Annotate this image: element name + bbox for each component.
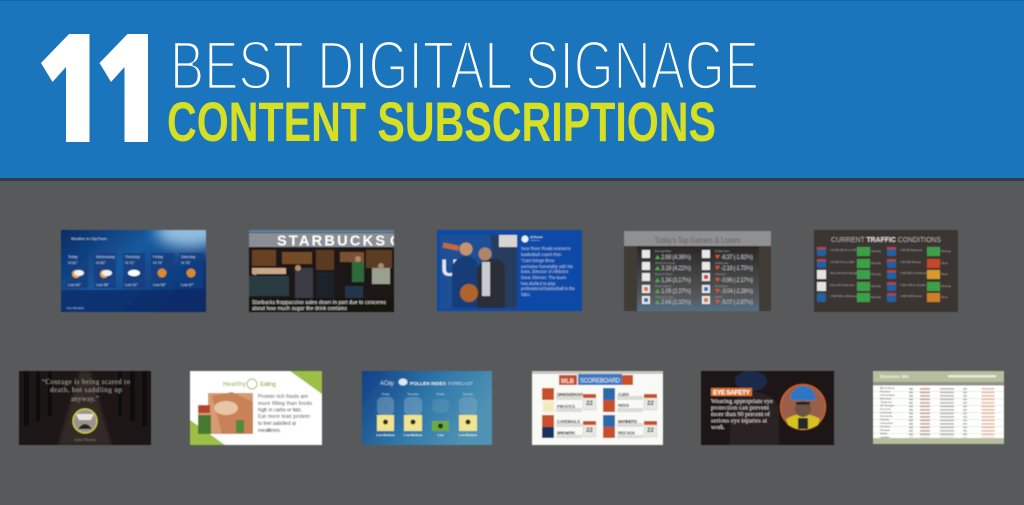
- thumbnail: data table: Nomura: [880, 407, 891, 411]
- thumbnail: top gainers and losers: 3.18 (4.22%): [661, 266, 691, 272]
- thumbnail: healthy eating: [190, 371, 322, 445]
- thumbnail: healthy eating: Healthy: [223, 382, 247, 388]
- thumbnail: weather forecast: Weather in City/Town: [71, 237, 107, 241]
- thumbnail: current traffic conditions: [814, 230, 958, 312]
- thumbnail: top gainers and losers: Starbucks: [715, 261, 729, 265]
- thumbnail: top gainers and losers: Dow & Chem: [655, 272, 673, 276]
- thumbnail: current traffic conditions: I-405 SB Renton: [900, 294, 923, 298]
- title number: 11: 1: [100, 11, 185, 181]
- thumbnail: current traffic conditions: I-90 EB Bellevue: [900, 248, 923, 252]
- thumbnail: eye safety: protection can prevent: [711, 404, 769, 412]
- thumbnail: MLB scoreboard: MARINERS: [618, 419, 637, 424]
- thumbnail: current traffic conditions: Moving: [871, 284, 881, 288]
- thumbnail: pollen index forecast: Today: [381, 392, 390, 396]
- thumbnail: weather forecast: Low 60°: [68, 283, 82, 287]
- thumbnail: data table: Vanguard: [880, 421, 893, 425]
- thumbnail: employee spotlight: New River Rivals women's: [521, 246, 570, 251]
- thumbnail: weather forecast: Thursday: [125, 255, 140, 259]
- thumbnail: current traffic conditions: Moving: [941, 284, 951, 288]
- thumbnail: Starbucks news: about how much sugar the drink contains: [252, 306, 348, 312]
- thumbnail: pollen index forecast: 4-Day: [380, 380, 395, 387]
- thumbnail: MLB scoreboard: CUBS: [618, 392, 629, 397]
- thumbnail: eye safety: EYE SAFETY: [713, 390, 751, 396]
- thumbnail: top gainers and losers: Dominion: [715, 284, 728, 288]
- thumbnail: data table: Lazard: [880, 435, 890, 439]
- thumbnail: healthy eating: Eat more lean protein: [258, 414, 310, 420]
- thumbnail: top gainers and losers: -5.07 (-2.87%): [721, 300, 753, 306]
- thumbnail: inspirational quote: death, but saddling up: [50, 386, 122, 394]
- thumbnail: healthy eating: more filling than foods: [258, 401, 312, 407]
- thumbnail: top gainers and losers: -3.04 (-2.28%): [721, 289, 753, 295]
- thumbnail: top gainers and losers: 1.09 (2.37%): [661, 289, 691, 295]
- thumbnail: Starbucks news: STARBUCKS: [277, 234, 385, 250]
- thumbnail: MLB scoreboard: SCOREBOARD: [580, 378, 621, 384]
- thumbnail: weather forecast: Wednesday: [96, 255, 115, 259]
- thumbnail: inspirational quote: [19, 371, 151, 445]
- thumbnail: eye safety: [701, 371, 834, 445]
- thumbnail: data table: Associated: [880, 393, 895, 397]
- thumbnail: healthy eating: mealtimes.: [258, 428, 281, 434]
- thumbnail: weather forecast: Hi 80°: [96, 261, 106, 265]
- thumbnail: weather forecast: Low 51°: [125, 283, 139, 287]
- thumbnail: current traffic conditions: I-520 WB to Seattle: [900, 283, 926, 287]
- thumbnail: healthy eating: high in carbs or fats.: [258, 408, 302, 414]
- thumbnail: current traffic conditions: Moving: [871, 261, 881, 265]
- thumbnail: MLB scoreboard: CARDINALS: [557, 419, 580, 424]
- thumbnail: current traffic conditions: Slow: [941, 272, 948, 276]
- thumbnail: weather forecast: Hi 81°: [68, 261, 78, 265]
- thumbnail: pollen index forecast: Low-Medium: [459, 433, 477, 437]
- thumbnail: top gainers and losers: -8.37 (-1.82%): [721, 255, 753, 261]
- thumbnail: inspirational quote: John Wayne: [74, 437, 96, 442]
- thumbnail: current traffic conditions: Slow: [941, 261, 948, 265]
- thumbnail: top gainers and losers: Energy/Nike: [655, 249, 672, 253]
- subtitle: CONTENT SUBSCRIPTIONS: CONTENT SUBSCRIPTIONS: [167, 90, 716, 153]
- title number: 11: 1: [42, 11, 127, 181]
- thumbnail: eye safety: work.: [711, 424, 725, 431]
- thumbnail: current traffic conditions: Slow: [941, 295, 948, 299]
- thumbnail: top gainers and losers: Dollar Gen: [715, 249, 730, 253]
- thumbnail: top gainers and losers: Ross Stores: [655, 284, 672, 288]
- thumbnail: employee spotlight: NBA.: [521, 292, 531, 297]
- thumbnail: MLB scoreboard: 22: [647, 428, 654, 434]
- header banner: [0, 0, 1024, 181]
- thumbnail: MLB scoreboard: 22: [586, 428, 593, 434]
- thumbnail: top gainers and losers: AT&T: [715, 295, 723, 299]
- thumbnail: employee spotlight: Dane Skinner. The team: [521, 275, 567, 280]
- thumbnail: healthy eating: to feel satisfied at: [258, 421, 297, 427]
- thumbnail: weather forecast: Friday: [153, 255, 163, 259]
- thumbnail: weather forecast: Low 57°: [181, 283, 195, 287]
- thumbnail: data table: Bloomberg: [880, 386, 895, 390]
- thumbnail: inspirational quote: anyway.”: [71, 395, 99, 403]
- thumbnail: data table: Wells: [880, 432, 888, 436]
- thumbnail: current traffic conditions: I-5 SB Pine to 520: [830, 260, 855, 264]
- thumbnail: weather forecast: Hi 76°: [181, 261, 191, 265]
- thumbnail: top gainers and losers: Shell Oil Group: [655, 261, 676, 265]
- thumbnail: Starbucks news: Starbucks frappuccino sales down in part due to concerns: [252, 300, 386, 306]
- thumbnail: weather forecast: Low 58°: [96, 283, 110, 287]
- thumbnail: current traffic conditions: Hwy 99 South Ave: [830, 283, 855, 287]
- thumbnail: weather forecast: Today: [68, 255, 78, 259]
- thumbnail: top gainers and losers: -2.18 (-1.73%): [721, 266, 753, 272]
- thumbnail: data table: Reuters: [880, 390, 891, 394]
- thumbnail: data table: Fidelity: [880, 418, 890, 422]
- thumbnail: employee spotlight: @jillbennet: [530, 239, 540, 242]
- thumbnail: pollen index forecast: POLLEN INDEX: [410, 381, 447, 387]
- thumbnail: eye safety: Wearing appropriate eye: [711, 398, 773, 405]
- title number: 11: [41, 34, 148, 142]
- thumbnail: weather forecast: [60, 229, 207, 312]
- thumbnail: employee spotlight: "Cam brings three: [521, 258, 555, 263]
- thumbnail: eye safety: more than 90 percent of: [711, 411, 771, 418]
- thumbnail: pollen index forecast: Sunday: [463, 392, 474, 396]
- thumbnail: current traffic conditions: Moving: [941, 249, 951, 253]
- thumbnail: MLB scoreboard: RED SOX: [618, 430, 635, 436]
- thumbnail: employee spotlight: has drafted to play: [521, 281, 556, 286]
- thumbnail: data table: JP Morgan: [880, 404, 895, 408]
- thumbnail: top gainers and losers: [624, 231, 771, 311]
- thumbnail: MLB scoreboard: MLB: [561, 379, 575, 385]
- thumbnail: employee spotlight: [437, 230, 582, 311]
- thumbnail: current traffic conditions: Moving: [871, 249, 881, 253]
- thumbnail: pollen index forecast: Tuesday: [407, 392, 419, 396]
- thumbnail: MLB scoreboard: 22: [647, 401, 654, 407]
- thumbnail: top gainers and losers: 2.68 (4.38%): [661, 255, 691, 261]
- thumbnail: Starbucks news: C: [390, 234, 401, 250]
- thumbnail: employee spotlight: basketball coach Ron: [521, 252, 562, 257]
- thumbnail: eye safety: serious eye injuries at: [711, 418, 767, 424]
- thumbnail: data table: Deutsche: [880, 414, 893, 418]
- title line: BEST DIGITAL SIGNAGE: BEST DIGITAL SIGNAGE: [170, 27, 759, 104]
- thumbnail: data table: Business 360: [880, 374, 909, 379]
- thumbnail: MLB scoreboard: 22: [586, 401, 593, 407]
- thumbnail: MLB scoreboard: BREWERS: [557, 430, 575, 436]
- thumbnail: current traffic conditions: Moving: [871, 295, 881, 299]
- thumbnail: current traffic conditions: I-5 NB Mill St to 405: [830, 248, 857, 252]
- thumbnail: data table: Barclays: [880, 396, 892, 400]
- thumbnail: top gainers and losers: 2.64 (2.32%): [661, 300, 691, 306]
- thumbnail: employee spotlight: exclusive honorably with his: [521, 264, 573, 269]
- thumbnail: current traffic conditions: I-520 EB to Redmond: [900, 271, 929, 275]
- thumbnail: healthy eating: Eating: [260, 382, 276, 388]
- thumbnail: data table: [873, 371, 1004, 444]
- thumbnail: current traffic conditions: I-90 WB Mercer: [900, 260, 921, 264]
- thumbnail: MLB scoreboard: REDS: [618, 403, 629, 408]
- thumbnail: weather forecast: Hi 74°: [153, 261, 163, 265]
- thumbnail: weather forecast: Saturday: [181, 255, 196, 259]
- thumbnail: MLB scoreboard: [532, 371, 663, 445]
- thumbnail: pollen index forecast: Low-Medium: [376, 433, 395, 437]
- thumbnail: employee spotlight: UP: [441, 255, 474, 282]
- thumbnail: pollen index forecast: [362, 371, 492, 445]
- thumbnail: healthy eating: Protein rich foods are: [258, 394, 308, 400]
- thumbnail: pollen index forecast: Friday: [436, 392, 445, 396]
- thumbnail: data table: Goldman: [880, 410, 893, 414]
- thumbnail: current traffic conditions: Moving: [871, 272, 881, 276]
- thumbnail: employee spotlight: boss, Director of Athletics: [521, 269, 568, 274]
- thumbnail: top gainers and losers: Today's Top Gainers & Losers: [654, 235, 740, 245]
- thumbnail: pollen index forecast: Low: [438, 433, 444, 437]
- thumbnail: current traffic conditions: I-405 NB to Bellevue: [830, 294, 858, 298]
- thumbnail: weather forecast: Hi 71°: [125, 261, 135, 265]
- thumbnail: inspirational quote: “Courage is being scared to: [42, 378, 130, 386]
- thumbnail: MLB scoreboard: PIRATES: [557, 404, 575, 409]
- thumbnail: data table: Citigroup: [880, 400, 892, 404]
- thumbnail: pollen index forecast: FORECAST: [448, 381, 473, 387]
- thumbnail: top gainers and losers: Johnson: [715, 272, 727, 276]
- thumbnail: employee spotlight: professional basketball in the: [521, 286, 576, 291]
- thumbnail: employee spotlight: Jill Bennet: [530, 236, 543, 239]
- thumbnail: weather forecast: Your Weather: [66, 306, 84, 310]
- thumbnail: MLB scoreboard: DIAMONDBACKS: [557, 392, 583, 397]
- thumbnail: data table: Morgan: [880, 428, 891, 432]
- thumbnail: current traffic conditions: CURRENT TRAFFIC CONDITIONS: [831, 237, 941, 244]
- thumbnail: current traffic conditions: Hwy 99 North Bridge: [830, 271, 858, 275]
- thumbnail: top gainers and losers: Chevron Corp: [655, 295, 674, 299]
- thumbnail: top gainers and losers: -0.96 (-2.17%): [721, 278, 753, 284]
- thumbnail: weather forecast: Low 55°: [153, 283, 167, 287]
- thumbnail: pollen index forecast: Low-Medium: [404, 433, 422, 437]
- thumbnail: top gainers and losers: 1.34 (3.17%): [661, 278, 691, 284]
- thumbnail: data table: Charles: [880, 424, 891, 428]
- thumbnail: Starbucks news: [249, 230, 401, 312]
